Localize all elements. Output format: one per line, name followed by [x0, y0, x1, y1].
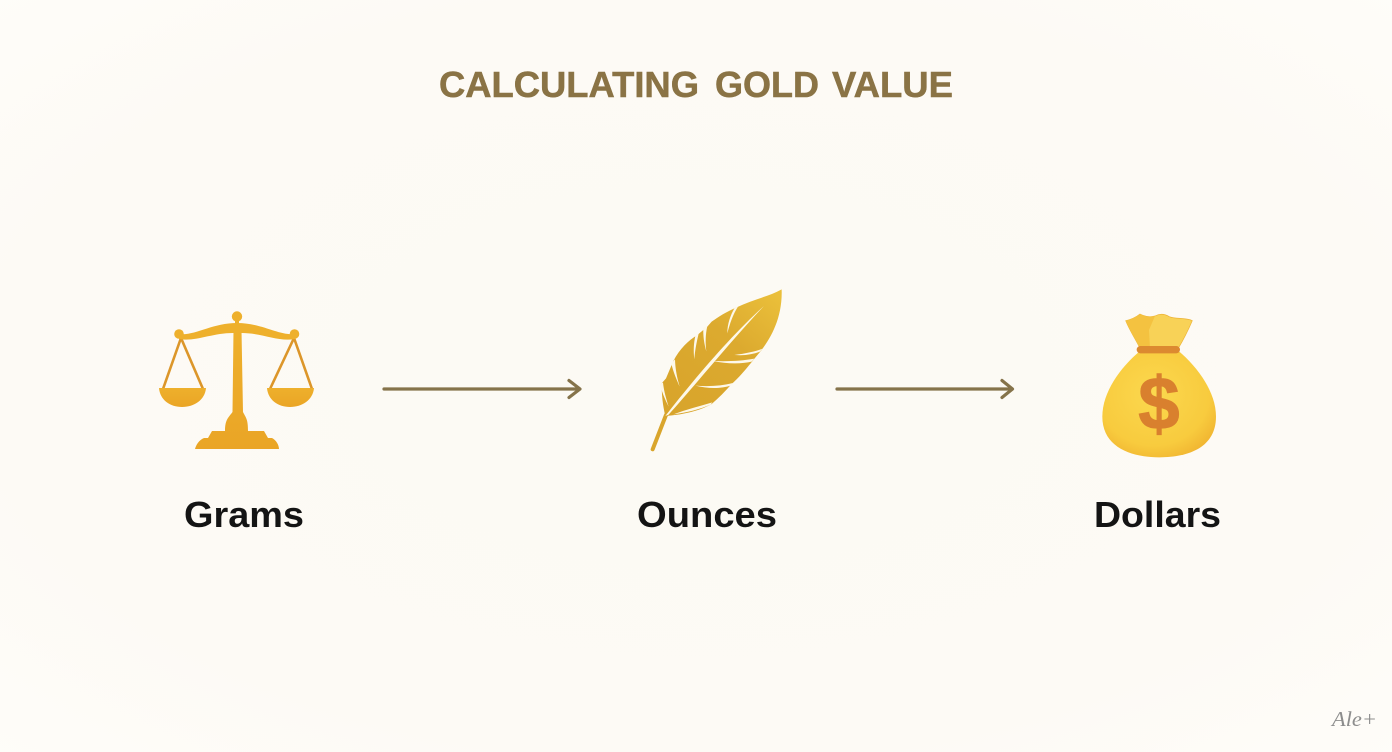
label: grams: Grams	[184, 494, 304, 535]
bag ruffle	[1126, 314, 1192, 348]
dollar sign: $	[1138, 362, 1180, 445]
bag tie	[1137, 346, 1180, 353]
title	[439, 64, 953, 105]
title: GOLD	[715, 64, 819, 105]
arrow: ounces to dollars	[837, 380, 1012, 398]
feather quill	[653, 415, 666, 449]
feather slits	[660, 306, 764, 416]
scale beam	[179, 323, 295, 340]
scale pillar and base	[195, 330, 279, 449]
scale pans	[159, 388, 206, 407]
icon: money bag	[1102, 314, 1216, 457]
label: ounces: Ounces	[637, 494, 777, 535]
icon: balance scale	[159, 311, 314, 449]
label: dollars: Dollars	[1094, 494, 1221, 535]
title: VALUE	[832, 64, 953, 105]
icon: feather	[653, 289, 782, 449]
scale strings	[163, 338, 312, 389]
signature mark: Ale+	[1330, 707, 1377, 731]
bag body	[1102, 352, 1216, 457]
arrow: grams to ounces	[384, 380, 580, 398]
title: CALCULATING	[439, 64, 699, 105]
feather vane	[662, 289, 782, 416]
